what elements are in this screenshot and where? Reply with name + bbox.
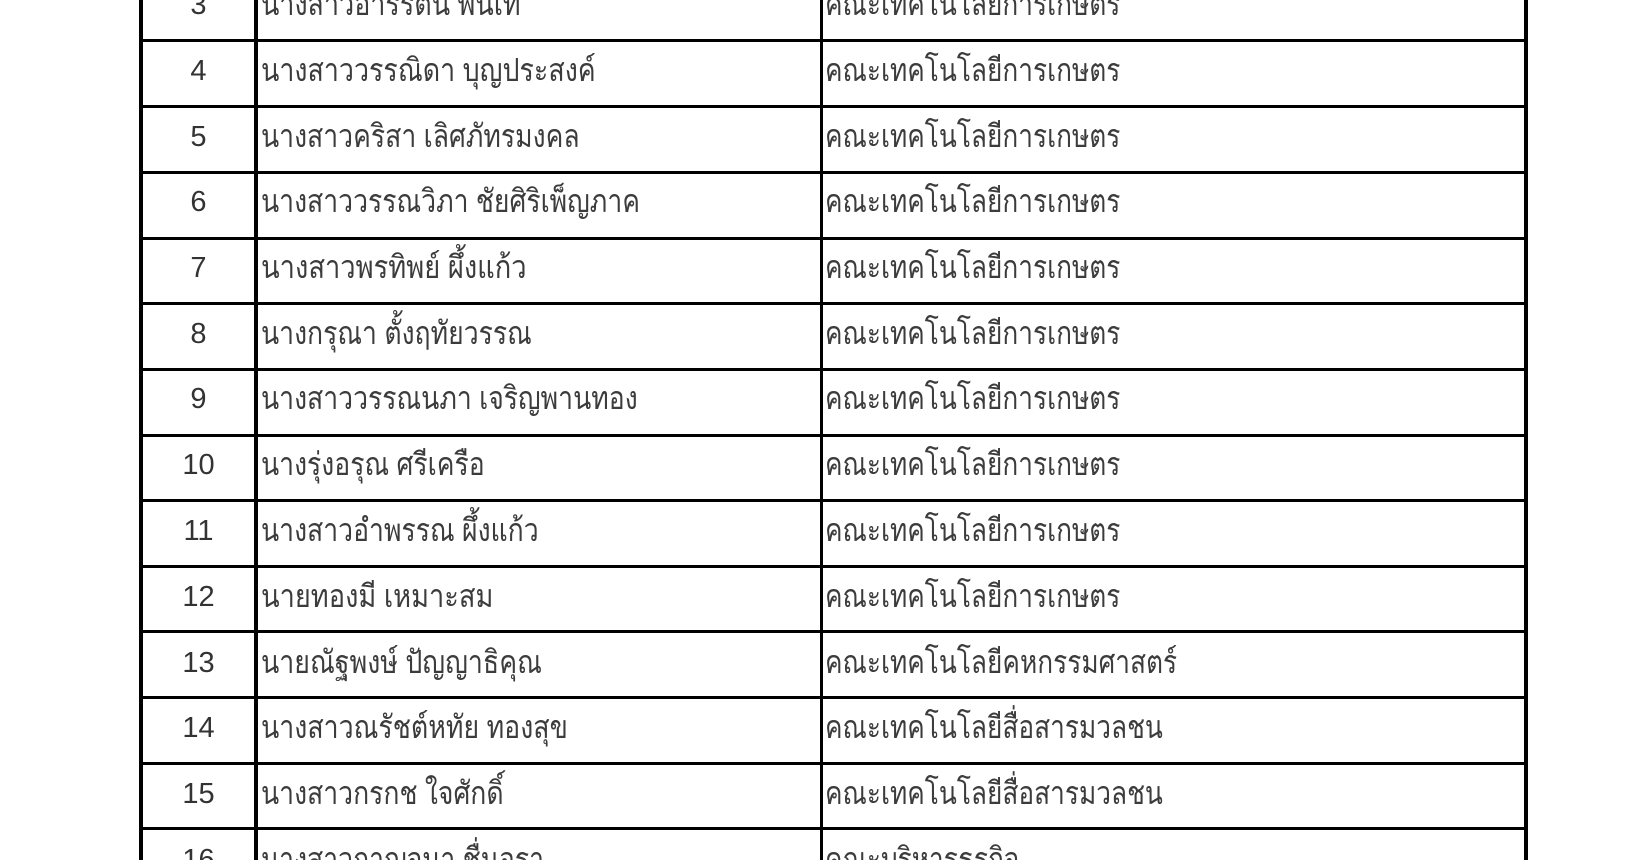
- row 5: นางสาวคริสา เลิศภัทรมงคล: [261, 118, 580, 154]
- row 11: 11: [183, 515, 214, 547]
- row 5: 5: [190, 121, 207, 153]
- row 4: [190, 52, 1120, 90]
- row 12: นายทองมี เหมาะสม: [261, 578, 493, 614]
- row 10: [182, 446, 1120, 484]
- row 12: [182, 578, 1120, 614]
- row 15: คณะเทคโนโลยีสื่อสารมวลชน: [825, 775, 1163, 811]
- row 8: [190, 310, 1120, 352]
- row 7: 7: [190, 252, 207, 284]
- row 8: 8: [190, 318, 207, 350]
- row 3: [190, 0, 1120, 22]
- row 12: คณะเทคโนโลยีการเกษตร: [825, 578, 1120, 614]
- row 7: นางสาวพรทิพย์ ผึ้งแก้ว: [261, 249, 527, 285]
- row 14: 14: [182, 712, 215, 744]
- row 12: 12: [182, 581, 215, 613]
- row 6: นางสาววรรณวิภา ชัยศิริเพ็ญภาค: [261, 183, 640, 219]
- row 11: [183, 507, 1120, 548]
- row 13: 13: [182, 647, 215, 679]
- row 10: นางรุ่งอรุณ ศรีเครือ: [261, 446, 485, 482]
- row 8: คณะเทคโนโลยีการเกษตร: [825, 315, 1120, 351]
- row 4: นางสาววรรณิดา บุญประสงค์: [261, 52, 596, 88]
- row 7: คณะเทคโนโลยีการเกษตร: [825, 249, 1120, 285]
- row 5: คณะเทคโนโลยีการเกษตร: [825, 118, 1120, 154]
- row 4: คณะเทคโนโลยีการเกษตร: [825, 52, 1120, 88]
- row 13: นายณัฐพงษ์ ปัญญาธิคุณ: [261, 644, 542, 680]
- row 9: 9: [190, 383, 207, 415]
- row 9: นางสาววรรณนภา เจริญพานทอง: [261, 380, 638, 416]
- row 10: 10: [182, 449, 215, 481]
- row 15: 15: [182, 778, 215, 810]
- row 16: [182, 837, 1019, 860]
- row 14: [182, 705, 1163, 746]
- row 11: คณะเทคโนโลยีการเกษตร: [825, 512, 1120, 548]
- row 15: นางสาวกรกช ใจศักดิ์: [261, 775, 504, 811]
- row 14: คณะเทคโนโลยีสื่อสารมวลชน: [825, 709, 1163, 745]
- row 15: [182, 770, 1163, 811]
- row 13: คณะเทคโนโลยีคหกรรมศาสตร์: [825, 644, 1177, 680]
- row 13: [182, 644, 1177, 682]
- row 9: [190, 380, 1120, 416]
- row 11: นางสาวอำพรรณ ผึ้งแก้ว: [261, 512, 539, 548]
- row 6: [190, 182, 1120, 219]
- row 8: นางกรุณา ตั้งฤทัยวรรณ: [261, 315, 532, 351]
- row 6: คณะเทคโนโลยีการเกษตร: [825, 183, 1120, 219]
- row 9: คณะเทคโนโลยีการเกษตร: [825, 380, 1120, 416]
- row 14: นางสาวณรัชต์หทัย ทองสุข: [261, 709, 568, 745]
- row 5: [190, 118, 1120, 154]
- row 6: 6: [190, 186, 207, 218]
- row 4: 4: [190, 55, 207, 87]
- row 10: คณะเทคโนโลยีการเกษตร: [825, 446, 1120, 482]
- row 7: [190, 244, 1120, 285]
